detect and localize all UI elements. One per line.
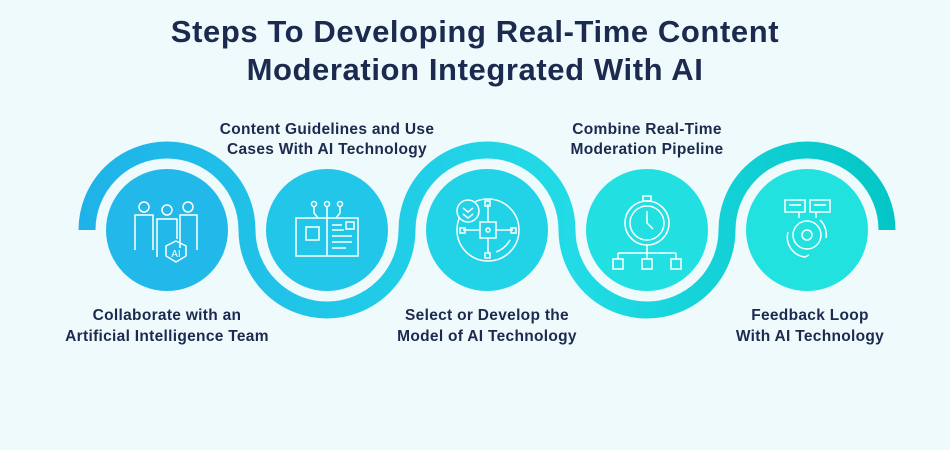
- title: Steps To Developing Real-Time Content: [171, 14, 779, 49]
- label 1: Collaborate with an: [93, 307, 241, 324]
- icon: book chip: [296, 202, 358, 256]
- label 4: Combine Real-Time: [572, 121, 722, 138]
- label 5: Feedback Loop: [751, 307, 869, 324]
- label 2: Cases With AI Technology: [227, 141, 427, 158]
- circle 5: [746, 169, 868, 291]
- circle 3: [426, 169, 548, 291]
- label 5: [736, 307, 884, 345]
- circle 4: [586, 169, 708, 291]
- label 2: Content Guidelines and Use: [220, 121, 434, 138]
- label 1: [65, 307, 269, 345]
- label 1: Artificial Intelligence Team: [65, 328, 269, 345]
- icon: clock pipeline: [613, 196, 681, 269]
- label 3: Select or Develop the: [405, 307, 569, 324]
- label 5: With AI Technology: [736, 328, 884, 345]
- icon: feedback loop: [785, 200, 830, 257]
- title: Moderation Integrated With AI: [247, 52, 703, 87]
- circle 1: [106, 169, 228, 291]
- label 3: [397, 307, 577, 345]
- circle 2: [266, 169, 388, 291]
- label 3: Model of AI Technology: [397, 328, 577, 345]
- label 4: Moderation Pipeline: [571, 141, 723, 158]
- icon: team AI: AI: [171, 249, 181, 260]
- icon: model: [457, 199, 519, 261]
- label 4: [571, 121, 723, 158]
- wave band: [87, 150, 887, 310]
- title: [171, 14, 779, 87]
- label 2: [220, 121, 434, 158]
